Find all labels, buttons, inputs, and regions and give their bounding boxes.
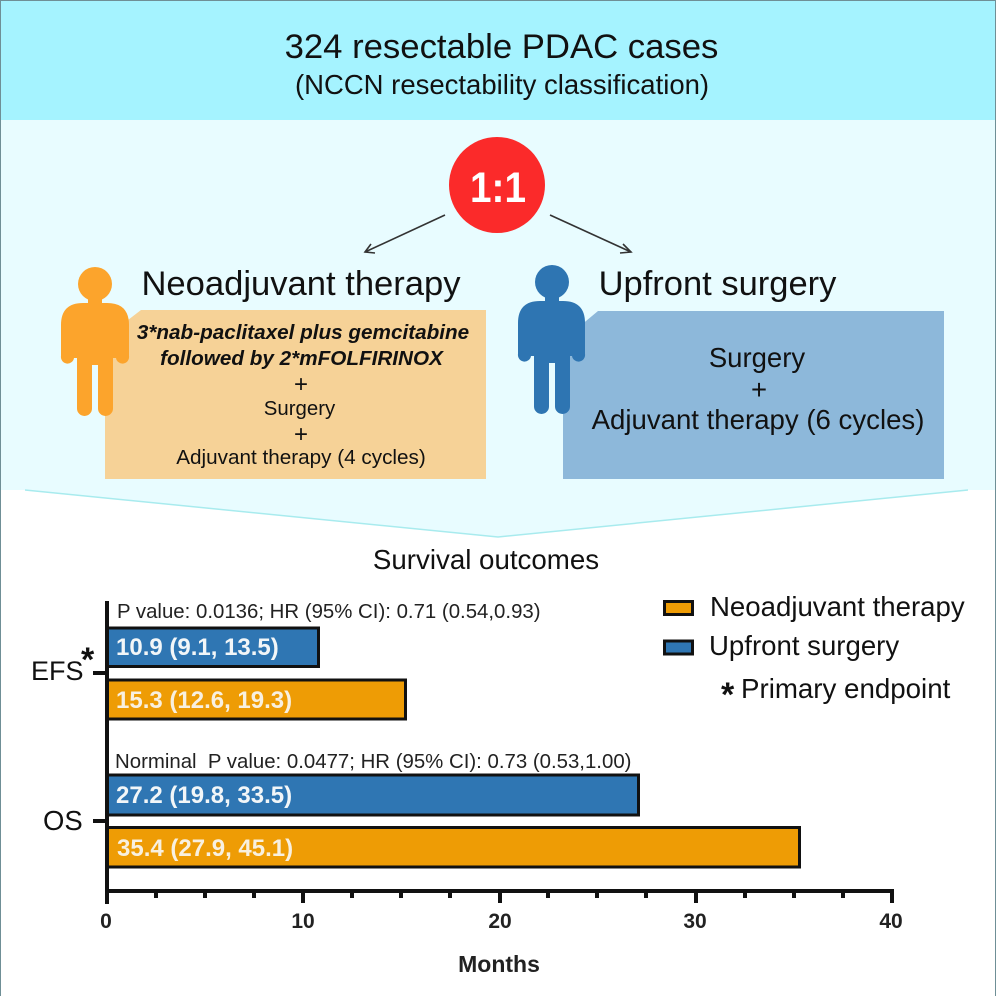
arrow: to neoadjuvant arm	[365, 215, 445, 253]
bar: OS upfront surgery: 27.2 (19.8, 33.5)	[116, 782, 292, 809]
bar: EFS upfront surgery: 10.9 (9.1, 13.5)	[116, 634, 279, 661]
panel: header banner	[0, 0, 996, 120]
surgery text: Surgery	[709, 342, 805, 373]
subtitle: (NCCN resectability classification)	[295, 69, 709, 100]
x axis tick labels: 0	[100, 910, 112, 933]
x axis title: Months	[458, 951, 540, 977]
heading: survival outcomes: Survival outcomes	[373, 544, 599, 575]
EFS asterisk: *	[81, 641, 95, 679]
bar: OS neoadjuvant: 35.4 (27.9, 45.1)	[117, 835, 293, 862]
title: 324 resectable PDAC cases	[285, 28, 718, 66]
legend label: neoadjuvant: Neoadjuvant therapy	[710, 591, 965, 622]
x axis	[105, 891, 894, 903]
bar: EFS upfront surgery	[108, 628, 318, 666]
bar chart: survival outcomes	[31, 601, 903, 977]
legend label: upfront: Upfront surgery	[709, 630, 899, 661]
plus sign: +	[751, 374, 767, 405]
adjuvant text: Adjuvant therapy (4 cycles)	[176, 446, 426, 469]
icon: orange person	[61, 267, 129, 416]
plus sign: +	[294, 421, 308, 448]
bar: OS upfront surgery	[108, 775, 638, 815]
y axis label: EFS: EFS	[31, 656, 84, 686]
y axis label: OS: OS	[43, 805, 83, 836]
bar: EFS neoadjuvant	[108, 680, 406, 719]
surgery text: Surgery	[264, 398, 336, 420]
icon: blue person	[518, 265, 585, 414]
x axis tick labels	[100, 910, 903, 933]
panel divider: funnel edge	[25, 490, 968, 537]
badge: 1:1 randomisation	[449, 137, 545, 233]
badge: 1:1 randomisation: 1:1	[470, 164, 526, 212]
x axis tick labels: 10	[291, 910, 315, 933]
legend asterisk: *	[721, 676, 735, 714]
y axis	[93, 601, 107, 904]
panel: upfront surgery arm box	[563, 311, 944, 479]
x axis tick labels: 40	[879, 910, 903, 933]
legend	[664, 591, 965, 714]
plus sign: +	[294, 371, 308, 398]
panel: neoadjuvant arm box	[105, 310, 486, 479]
arrow: to upfront surgery arm	[550, 215, 631, 253]
legend label: primary endpoint: Primary endpoint	[741, 673, 951, 704]
x axis tick labels: 30	[683, 910, 707, 933]
legend swatch: upfront	[664, 641, 692, 654]
legend swatch: neoadjuvant	[664, 602, 692, 614]
bar: EFS neoadjuvant: 15.3 (12.6, 19.3)	[116, 687, 292, 714]
heading: upfront surgery: Upfront surgery	[599, 265, 837, 303]
x axis tick labels: 20	[488, 910, 512, 933]
regimen text: 3*nab-paclitaxel plus gemcitabine	[137, 321, 469, 344]
heading: neoadjuvant therapy: Neoadjuvant therapy	[141, 265, 461, 303]
panel: neoadjuvant arm box: followed by 2*mFOLFIRINOX	[160, 347, 444, 370]
annotation: OS statistics: Norminal P value: 0.0477; HR (95% CI): 0.73 (0.53,1.00)	[115, 751, 631, 773]
adjuvant text: Adjuvant therapy (6 cycles)	[592, 404, 924, 435]
bar: OS neoadjuvant	[108, 828, 800, 867]
annotation: EFS statistics: P value: 0.0136; HR (95% CI): 0.71 (0.54,0.93)	[117, 601, 541, 623]
panel: trial design background	[0, 120, 996, 537]
